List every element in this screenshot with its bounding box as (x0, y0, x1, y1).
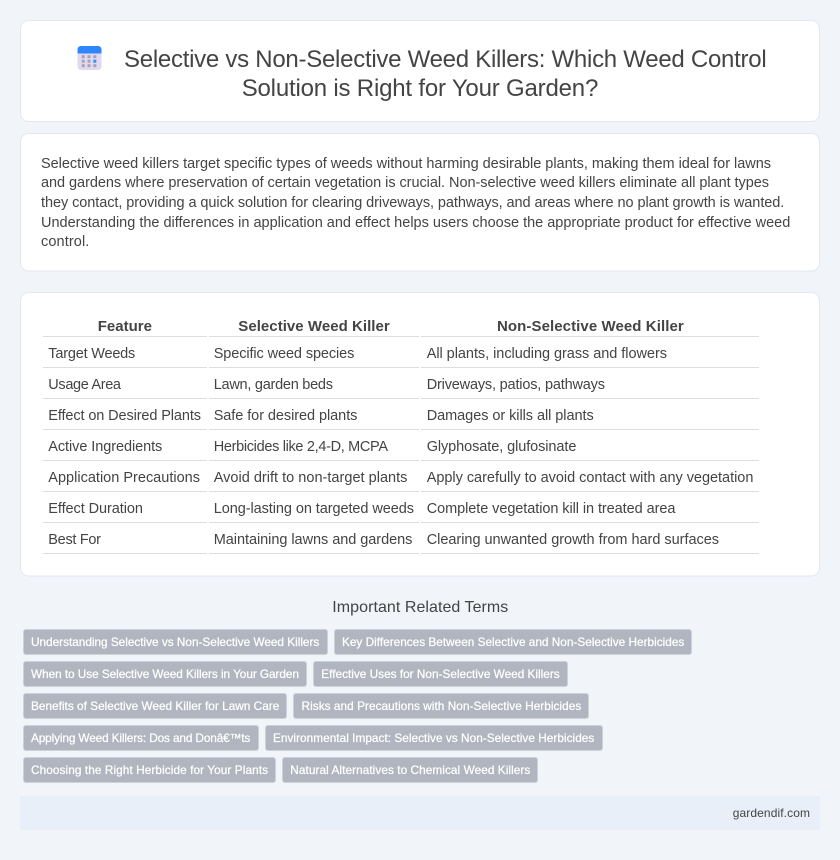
table row: effect on desired plants: Damages or kills all plants (427, 408, 594, 424)
tag: Applying Weed Killers: Dos and Donâ€™ts (31, 731, 250, 745)
tag (24, 726, 258, 750)
tag: Choosing the Right Herbicide for Your Plants (31, 763, 268, 777)
table row: effect on desired plants (43, 408, 759, 430)
tag (24, 630, 328, 654)
title: Solution is Right for Your Garden? (242, 75, 598, 102)
table row: application precautions: Apply carefully to avoid contact with any vegetation (427, 470, 753, 486)
table row: effect duration: Long-lasting on targeted weeds (214, 501, 414, 517)
table row: usage area: Driveways, patios, pathways (427, 377, 605, 393)
tag (294, 694, 588, 718)
table row: active ingredients (43, 439, 759, 461)
table row: application precautions: Avoid drift to non-target plants (214, 470, 407, 486)
table row: usage area: Usage Area (48, 377, 122, 393)
tag list: related terms (24, 630, 692, 782)
table row: active ingredients: Glyphosate, glufosinate (427, 439, 576, 455)
table row: application precautions: Application Precautions (48, 470, 200, 486)
title: Selective vs Non-Selective Weed Killers: Which Weed Control (124, 46, 767, 73)
tag: When to Use Selective Weed Killers in Your Garden (31, 667, 299, 681)
panel: title header (20, 20, 820, 122)
table header row: Selective Weed Killer (238, 318, 390, 335)
icon: calendar (78, 46, 102, 70)
tag: Benefits of Selective Weed Killer for Lawn Care (31, 699, 280, 713)
table row: best for: Best For (48, 532, 101, 548)
table row: effect on desired plants: Effect on Desired Plants (48, 408, 201, 424)
tag: Natural Alternatives to Chemical Weed Killers (290, 763, 530, 777)
table header row: Feature (98, 318, 152, 335)
table row: active ingredients: Active Ingredients (48, 439, 162, 455)
table row: usage area (43, 377, 759, 399)
tag (24, 662, 306, 686)
table row: target weeds: Specific weed species (214, 346, 354, 362)
table row: target weeds: All plants, including grass and flowers (427, 346, 667, 362)
table row: effect on desired plants: Safe for desired plants (214, 408, 357, 424)
tag (282, 758, 538, 782)
tag (266, 726, 602, 750)
table header row: Non-Selective Weed Killer (497, 318, 684, 335)
table row: best for: Maintaining lawns and gardens (214, 532, 412, 548)
text block: description: Understanding the differences in application and effect helps users choose the appropriate product for effective weed (41, 215, 790, 231)
tag: Effective Uses for Non-Selective Weed Killers (321, 667, 560, 681)
table row: usage area: Lawn, garden beds (214, 377, 333, 393)
text block: description (41, 156, 790, 250)
footer (20, 796, 820, 830)
table row: target weeds (43, 346, 759, 368)
panel: comparison table (20, 292, 820, 576)
tag: Key Differences Between Selective and Non-Selective Herbicides (342, 635, 684, 649)
tag: Understanding Selective vs Non-Selective Weed Killers (31, 635, 319, 649)
table row: application precautions (43, 470, 759, 492)
tag: Risks and Precautions with Non-Selective Herbicides (302, 699, 581, 713)
text block: description: Selective weed killers target specific types of weeds without harming desirable plants, making them ideal for lawns (41, 156, 771, 172)
tag (24, 758, 276, 782)
table row: effect duration: Complete vegetation kill in treated area (427, 501, 676, 517)
text block: description: and gardens where preservation of certain vegetation is crucial. Non-selective weed killers eliminate all plant types (41, 175, 769, 191)
table row: best for (43, 532, 759, 554)
table row: active ingredients: Herbicides like 2,4-D, MCPA (214, 439, 388, 455)
table row: target weeds: Target Weeds (48, 346, 135, 362)
footer: gardendif.com (733, 806, 810, 820)
tag (334, 630, 692, 654)
title (124, 46, 767, 102)
tag (314, 662, 568, 686)
text block: description: control. (41, 234, 89, 250)
table header row (43, 318, 759, 337)
table row: effect duration: Effect Duration (48, 501, 143, 517)
table row: best for: Clearing unwanted growth from hard surfaces (427, 532, 719, 548)
heading: important related terms: Important Related Terms (332, 599, 508, 616)
table row: effect duration (43, 501, 759, 523)
text block: description: they contact, providing a quick solution for clearing driveways, pathways, and areas where no plant growth is wanted. (41, 195, 784, 211)
panel: intro paragraph (20, 134, 820, 271)
tag: Environmental Impact: Selective vs Non-Selective Herbicides (273, 731, 594, 745)
tag (24, 694, 286, 718)
